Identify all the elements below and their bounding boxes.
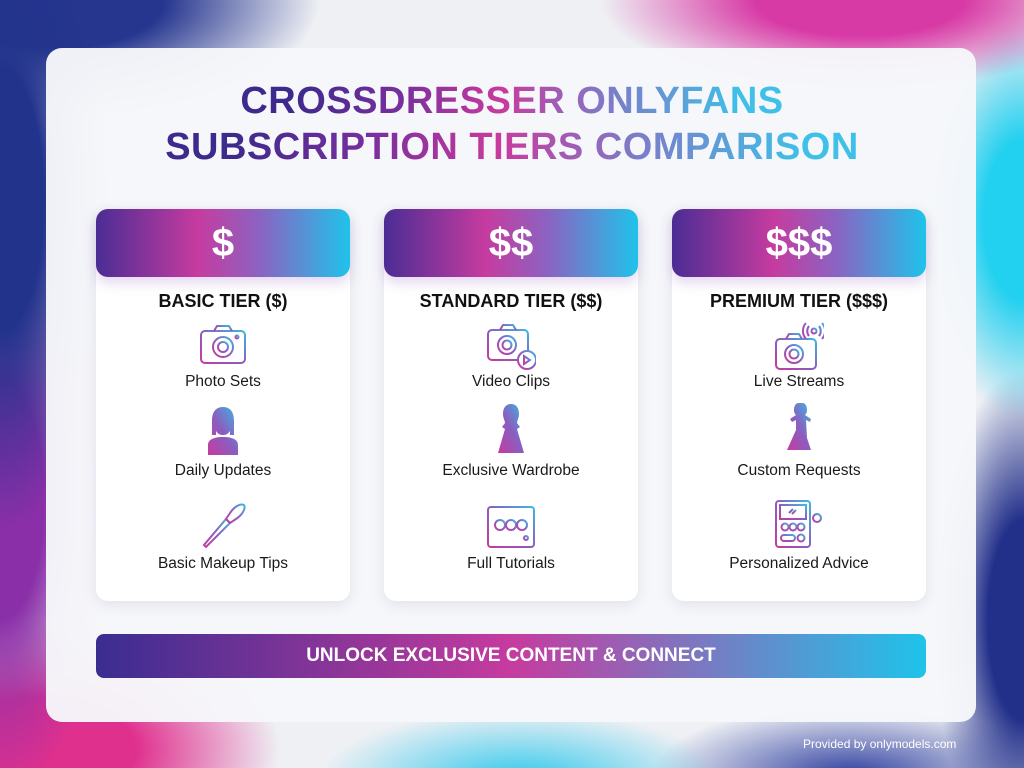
header: $ — [96, 209, 350, 277]
label: full tutorials: Full Tutorials — [467, 555, 555, 572]
icon: makeup kit — [775, 500, 822, 548]
icon: woman in gown — [787, 403, 811, 450]
label: photo sets: Photo Sets — [185, 373, 261, 390]
panel: main — [46, 48, 976, 722]
header: $$$: $$$ — [766, 221, 832, 265]
header: $$$ — [672, 209, 926, 277]
footer credit: Provided by onlymodels.com — [803, 737, 956, 751]
heading: premium tier: PREMIUM TIER ($$$) — [710, 291, 888, 311]
banner: call to action: UNLOCK EXCLUSIVE CONTENT & CONNECT — [306, 645, 716, 666]
icon: woman in dress — [498, 404, 524, 453]
icon: makeup brush — [202, 504, 246, 548]
icon: camera — [200, 325, 246, 364]
banner: call to action — [96, 634, 926, 678]
label: exclusive wardrobe: Exclusive Wardrobe — [442, 462, 580, 479]
label: daily updates: Daily Updates — [175, 462, 271, 479]
panel: standard tier — [384, 209, 638, 601]
label: basic makeup tips: Basic Makeup Tips — [158, 555, 288, 572]
icon: woman — [208, 407, 238, 455]
heading: standard tier: STANDARD TIER ($$) — [420, 291, 602, 311]
label: custom requests: Custom Requests — [737, 462, 861, 479]
panel: premium tier — [672, 209, 926, 601]
label: live streams: Live Streams — [754, 373, 844, 390]
title: CROSSDRESSER ONLYFANS — [240, 80, 784, 122]
icon: video camera — [487, 324, 536, 370]
label: personalized advice: Personalized Advice — [729, 555, 869, 572]
title — [165, 80, 859, 168]
header: $: $ — [212, 221, 234, 265]
header: $$: $$ — [489, 221, 533, 265]
heading: basic tier: BASIC TIER ($) — [158, 291, 288, 311]
icon: palette — [487, 506, 535, 548]
label: video clips: Video Clips — [472, 373, 550, 390]
icon: live camera — [775, 322, 824, 370]
title: SUBSCRIPTION TIERS COMPARISON — [165, 126, 859, 168]
panel: basic tier — [96, 209, 350, 601]
header: $$ — [384, 209, 638, 277]
